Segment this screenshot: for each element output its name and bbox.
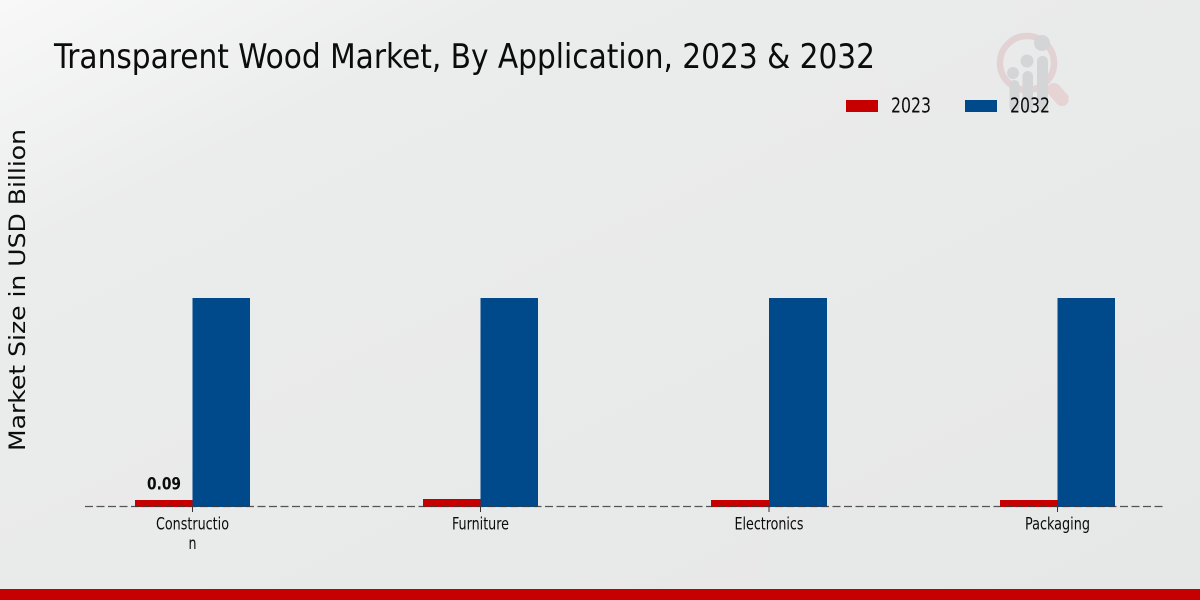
label: wrapped n: n xyxy=(188,534,196,553)
y-axis label: Market Size in USD Billion xyxy=(5,129,31,451)
legend: 2032: 2032 xyxy=(1010,94,1050,118)
footer bar xyxy=(0,589,1200,600)
value label: 0.09: 0.09 xyxy=(147,474,181,494)
legend: 2023 xyxy=(846,94,931,118)
label: Electronics: Electronics xyxy=(734,514,804,534)
icon: watermark logo xyxy=(1000,35,1062,112)
group: Construction xyxy=(135,298,250,507)
group: Furniture xyxy=(423,298,538,507)
group: Packaging xyxy=(1000,298,1115,507)
label: Construction: Constructio xyxy=(156,514,229,534)
label: Packaging: Packaging xyxy=(1025,514,1090,534)
x-axis baseline xyxy=(85,506,1165,508)
x-axis labels xyxy=(156,514,1090,553)
legend: 2032 xyxy=(965,94,1050,118)
title: Transparent Wood Market, By Application, 2023 & 2032 xyxy=(53,37,875,77)
legend: 2023: 2023 xyxy=(891,94,931,118)
bar chart xyxy=(135,298,1115,507)
label: Furniture: Furniture xyxy=(452,514,509,534)
legend xyxy=(846,94,1050,118)
group: Electronics xyxy=(711,298,827,507)
